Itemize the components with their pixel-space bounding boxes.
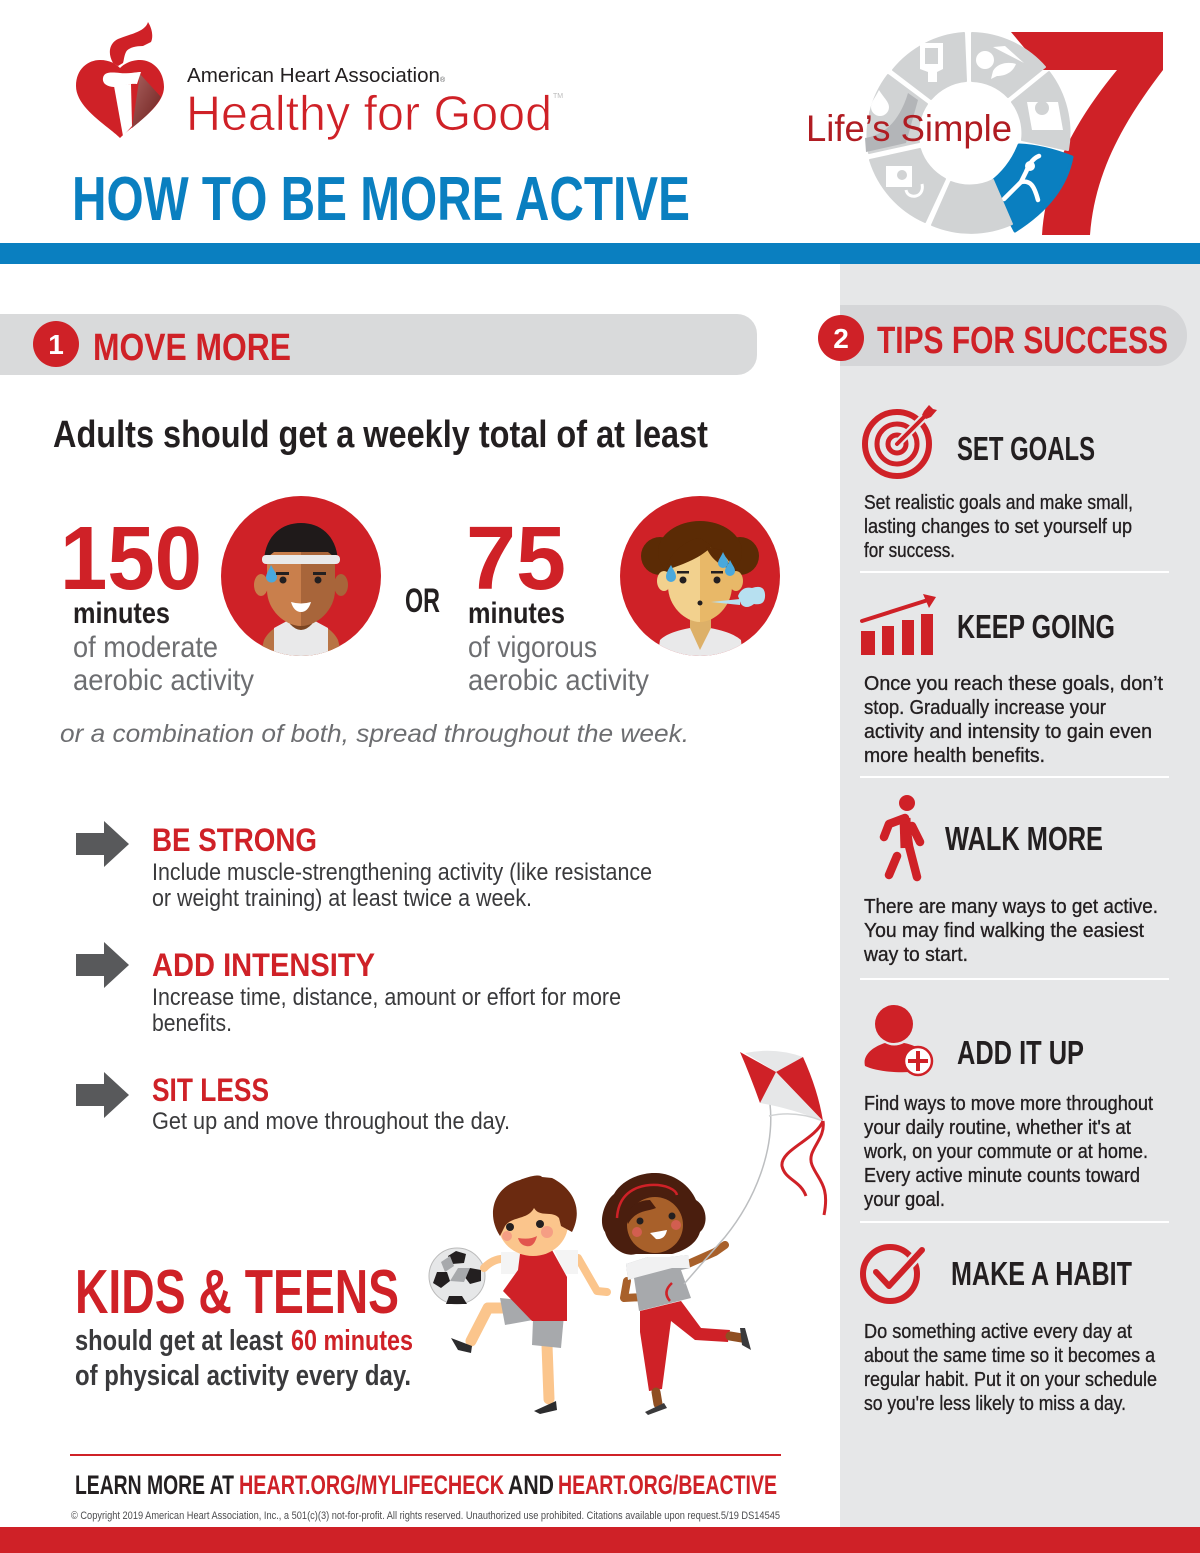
logo: American Heart Association Healthy for Good: ® bbox=[440, 76, 446, 84]
legs bbox=[471, 1308, 549, 1399]
icon: target bbox=[865, 405, 937, 476]
icon: heart and torch bbox=[76, 22, 164, 138]
spool bbox=[666, 1283, 672, 1301]
shorts bbox=[500, 1298, 564, 1348]
ring segment: blood pressure bbox=[870, 149, 945, 222]
stat: 75 minutes: of vigorous bbox=[468, 631, 597, 664]
arms bbox=[484, 1258, 607, 1292]
kids and teens callout: should get at least bbox=[75, 1325, 283, 1357]
tip: be strong: Include muscle-strengthening activity (like resistance bbox=[152, 859, 652, 886]
number badge 2: 2 bbox=[833, 323, 849, 354]
shirt bbox=[503, 1250, 567, 1321]
tip: add intensity: benefits. bbox=[152, 1010, 232, 1037]
tip card: walk more: WALK MORE bbox=[945, 820, 1103, 857]
red footer bar bbox=[0, 1527, 1200, 1553]
logo text: Life’s Simple bbox=[806, 108, 1012, 149]
icon: arrow bbox=[76, 821, 129, 867]
number badge 1 bbox=[33, 321, 79, 367]
tip: add intensity: Increase time, distance, amount or effort for more bbox=[152, 984, 621, 1011]
legs and shoes bbox=[656, 1336, 742, 1404]
tip card: set goals: for success. bbox=[864, 540, 955, 562]
kite bbox=[740, 1051, 823, 1121]
ring segment: food bbox=[972, 33, 1045, 97]
stat: 150 minutes: 150 bbox=[60, 509, 202, 609]
stat: 75 minutes: aerobic activity bbox=[468, 664, 649, 697]
tip card: set goals: Set realistic goals and make small, bbox=[864, 492, 1133, 514]
kite string bbox=[684, 1104, 771, 1284]
icon: arrow bbox=[76, 1072, 129, 1118]
tip card: keep going: Once you reach these goals, don’t bbox=[864, 673, 1163, 695]
tip card: walk more: There are many ways to get active. bbox=[864, 896, 1158, 918]
blue header divider bar bbox=[0, 243, 1200, 264]
logo: American Heart Association Healthy for Good bbox=[76, 22, 563, 141]
illustration: boy with soccer ball bbox=[429, 1175, 607, 1414]
tip: add intensity: ADD INTENSITY bbox=[152, 947, 375, 983]
call to action bbox=[75, 1470, 777, 1500]
tip card: make a habit: regular habit. Put it on your schedule bbox=[864, 1369, 1157, 1391]
tip card: walk more: way to start. bbox=[863, 944, 968, 966]
copyright: © Copyright 2019 American Heart Association, Inc., a 501(c)(3) not-for-profit. All rights reserved. Unauthorized use prohibited. Citations available upon request.5/19 DS14545 bbox=[71, 1510, 780, 1522]
neck and arms bbox=[624, 1245, 725, 1298]
tip card: make a habit bbox=[863, 1247, 1157, 1415]
tip card: walk more bbox=[863, 795, 1158, 966]
call to action: LEARN MORE AT bbox=[75, 1470, 234, 1500]
logo: American Heart Association Healthy for Good: TM bbox=[553, 93, 563, 100]
stat: 150 minutes: minutes bbox=[73, 597, 170, 630]
number badge 1: 1 bbox=[48, 329, 64, 360]
tip card: make a habit: MAKE A HABIT bbox=[951, 1255, 1132, 1292]
shoes bbox=[451, 1338, 557, 1414]
stat: 75 minutes: minutes bbox=[468, 597, 565, 630]
headband bbox=[617, 1185, 677, 1218]
tip card: add it up: your goal. bbox=[864, 1189, 945, 1211]
icon: person plus bbox=[865, 1005, 932, 1075]
tip card: make a habit: about the same time so it becomes a bbox=[864, 1345, 1156, 1367]
tip: be strong: BE STRONG bbox=[152, 822, 317, 858]
icon: walking figure bbox=[884, 795, 920, 877]
ring segment: physical activity (blue) bbox=[990, 145, 1072, 231]
tip card: keep going: stop. Gradually increase your bbox=[864, 697, 1106, 719]
tip card: keep going: more health benefits. bbox=[864, 745, 1045, 767]
hair bbox=[493, 1175, 577, 1236]
tip: sit less: Get up and move throughout the day. bbox=[152, 1108, 510, 1135]
ring segment: weight scale bbox=[1012, 72, 1070, 150]
tip card: make a habit: so you're less likely to miss a day. bbox=[864, 1393, 1126, 1415]
kids and teens callout: KIDS & TEENS bbox=[75, 1258, 399, 1327]
tip card: add it up: Find ways to move more throughout bbox=[864, 1093, 1153, 1115]
stat: 150 minutes bbox=[60, 509, 254, 697]
illustration: man with headband bbox=[221, 496, 381, 660]
call to action: HEART.ORG/MYLIFECHECK bbox=[239, 1470, 504, 1500]
tip: add intensity bbox=[76, 942, 621, 1037]
illustration: girl flying kite bbox=[602, 1051, 826, 1415]
tip card: keep going: KEEP GOING bbox=[957, 608, 1115, 645]
tip: be strong bbox=[76, 821, 652, 912]
kids and teens callout: 60 minutes bbox=[291, 1325, 413, 1357]
call to action: HEART.ORG/BEACTIVE bbox=[558, 1470, 777, 1500]
OR separator: OR bbox=[405, 582, 440, 620]
face bbox=[627, 1197, 683, 1253]
stat: 150 minutes: aerobic activity bbox=[73, 664, 254, 697]
stat: 75 minutes: 75 bbox=[466, 509, 566, 609]
tip card: add it up: your daily routine, whether it's at bbox=[864, 1117, 1131, 1139]
tip: be strong: or weight training) at least twice a week. bbox=[152, 885, 532, 912]
tip card: walk more: You may find walking the easiest bbox=[864, 920, 1144, 942]
call to action: AND bbox=[508, 1470, 554, 1500]
tip card: add it up: work, on your commute or at home. bbox=[863, 1141, 1148, 1163]
soccer ball bbox=[429, 1248, 485, 1304]
tip: sit less: SIT LESS bbox=[152, 1072, 269, 1108]
tip card: set goals bbox=[864, 405, 1133, 562]
heading: MOVE MORE bbox=[93, 327, 291, 369]
tip card: set goals: lasting changes to set yourself up bbox=[864, 516, 1132, 538]
italic note: or a combination of both, spread throughout the week. bbox=[60, 720, 689, 748]
ring segment: blank bbox=[932, 180, 1012, 233]
tip card: set goals: SET GOALS bbox=[957, 430, 1095, 467]
title: HOW TO BE MORE ACTIVE bbox=[72, 165, 690, 234]
tip card: keep going: activity and intensity to gain even bbox=[864, 721, 1152, 743]
shirt bbox=[626, 1255, 691, 1311]
icon: rising bars bbox=[861, 594, 936, 655]
kids and teens callout: of physical activity every day. bbox=[75, 1360, 411, 1392]
kids and teens callout bbox=[75, 1258, 413, 1392]
trousers bbox=[640, 1301, 730, 1391]
sleeves bbox=[501, 1250, 578, 1274]
hair bbox=[602, 1173, 706, 1255]
panel: tips background bbox=[840, 264, 1200, 1528]
brand name: Healthy for Good bbox=[186, 87, 552, 141]
tip card: make a habit: Do something active every day at bbox=[864, 1321, 1132, 1343]
section bar: move more bbox=[0, 314, 757, 375]
subheading: Adults should get a weekly total of at least bbox=[53, 414, 708, 456]
logo: Life's Simple 7 bbox=[806, 32, 1163, 235]
ring segment: cholesterol drop bbox=[865, 75, 927, 153]
tip card: keep going bbox=[861, 594, 1163, 767]
illustration: woman out of breath bbox=[620, 496, 780, 660]
big red seven bbox=[1011, 32, 1163, 235]
section bar: tips for success bbox=[818, 305, 1187, 366]
tip card: add it up: Every active minute counts toward bbox=[864, 1165, 1140, 1187]
organization name: American Heart Association bbox=[187, 65, 440, 87]
tip card: add it up: ADD IT UP bbox=[957, 1034, 1084, 1071]
head bbox=[498, 1192, 568, 1256]
tip card: add it up bbox=[863, 1005, 1153, 1211]
kite tail bbox=[782, 1121, 826, 1215]
icon: check mark circle bbox=[863, 1247, 922, 1301]
tip: sit less bbox=[76, 1072, 510, 1135]
stat: 75 minutes bbox=[466, 509, 649, 697]
stat: 150 minutes: of moderate bbox=[73, 631, 218, 664]
number badge 2 bbox=[818, 315, 864, 361]
footer bbox=[70, 1454, 781, 1522]
ring segment: blood sugar bbox=[893, 33, 966, 99]
icon: arrow bbox=[76, 942, 129, 988]
